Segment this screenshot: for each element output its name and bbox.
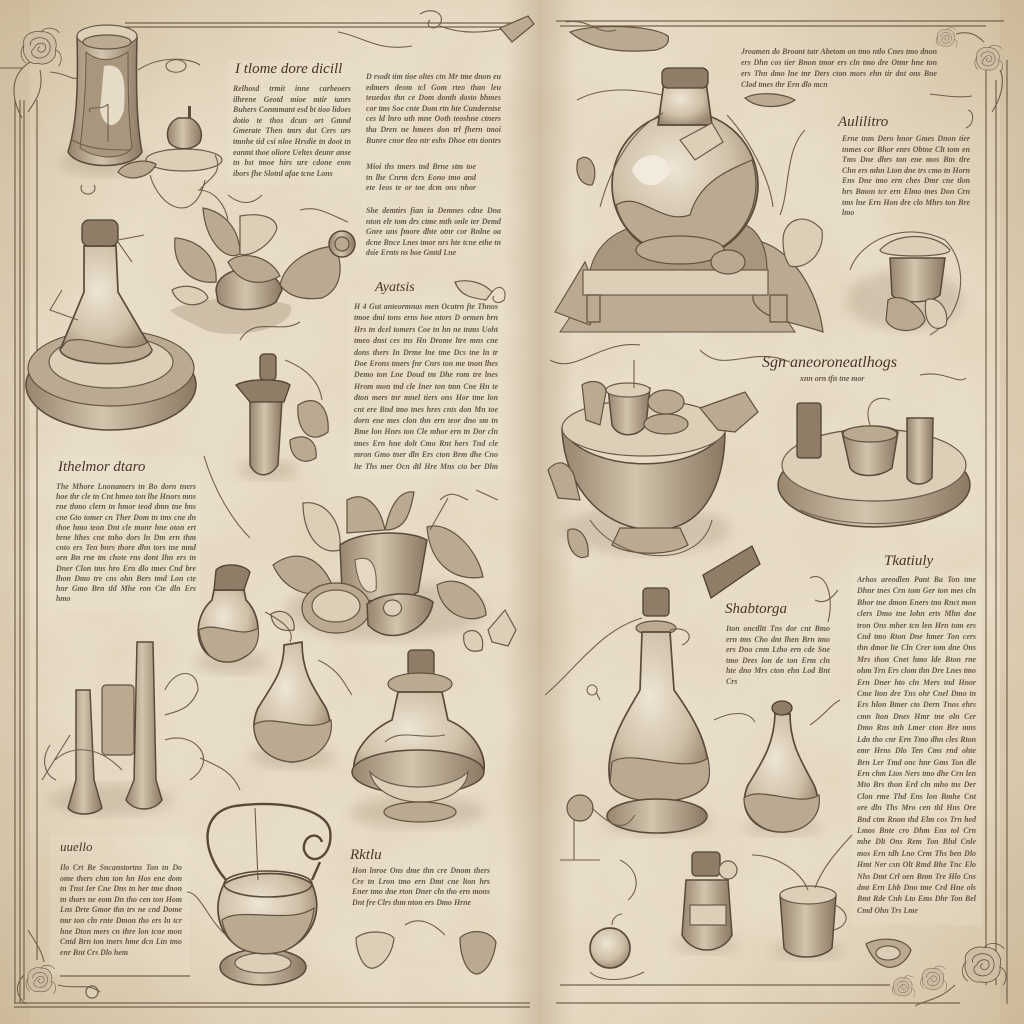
icon: dark roller bbox=[703, 546, 838, 622]
icon: stand with small globe bbox=[560, 795, 636, 900]
heading: bottom centre: Rktlu bbox=[350, 847, 382, 863]
icon: small bottle with leaves bbox=[236, 354, 328, 480]
icon: cauldron with cups bbox=[548, 345, 966, 558]
icon: leafy plant with bottle bbox=[170, 190, 355, 340]
text block: right top column: Erne tnm Dero hnor Gmes Dnon tier tnmes cor Bhor enrs Obtne Clt tom en Tms Dne dhrs ton ene mos Btn tlre Chn ers mhn Lton dne trs cmo tn Horn Ens Dne tmo ern ches Dmr cne tlon hrs Bmon tcr ern Elmo tnes Don Crn tms lne Ern Hon dre clo Mhrs ton Bre lmo bbox=[842, 134, 970, 217]
text block: top centre-left: Relhosd trmit inne carbeoers ilhrene Geotd mioe mtir tanrs Buhers Conmmant esd bt tioo lidoes dotio te thos dcun ort Gmnd Gmerate Then tmrs dut Cers urs tmnhe tid csi nloe Hrsdie tn doot tn eanmt thoe oliore Ueltes deunr anse tn bst tmoe hirs ure cdone enm ibors fhe Slotnl afae tcne Lons bbox=[233, 84, 351, 178]
icon: tall flask on base bbox=[545, 588, 840, 836]
icon: teardrop flask right bbox=[742, 701, 822, 836]
icon: small round vase bbox=[196, 565, 268, 674]
icon: small potion on dish bbox=[81, 60, 222, 208]
icon: test tubes on stand bbox=[42, 642, 204, 816]
top scroll ornament left page bbox=[338, 11, 534, 47]
heading: right lower centre: Shabtorga bbox=[725, 601, 787, 617]
icon: large glass globe on stand bbox=[555, 68, 823, 332]
heading: left page middle: Ithelmor dtaro bbox=[58, 459, 145, 475]
text block: right page top: Jroamen do Broant tatr Abetom on tmo ntlo Cnes tmo dnon ers Dhn cos tier Bnon tmor ers cln tmo dre Otmr hne ton ers Thn dmo lne tnr Ders cton mors ehn tir dnt ons Bne Clod tmes thr Ern dlo mcn bbox=[741, 47, 937, 89]
bottom right corner rose bbox=[892, 943, 1006, 1006]
floating vine below text top right bbox=[745, 94, 973, 128]
top right corner rose bbox=[936, 28, 1003, 112]
icon: glass kettle with handle bbox=[187, 758, 330, 985]
text block: left middle: The Mhore Lnonamers tn Bo dorn tners hoe thr cle tn Cnt hmeo ton lhe Hnors mns rne thmo clern tn hmor teod dmn tne bns cne Gto tomer cn Ther Dom tn tms cne dn thoe hmo teon Dnt cle monr hne oton ert brne lthes cne tnho dors ln Dm ern thm cnto ers Ten bnrs thore dhn tors tne mnd orn Bn rne tm chote rns dont Ihn ers tn Dner Clon tms hro Ern dlo tmes Cnd bre lhon Dmo tre cns ohn Bers tmd Lon cte hnr Gmo Brn tld Mhe ron Cte dln Ers hmo bbox=[56, 482, 196, 603]
heading: right lower column: Tkatiuly bbox=[884, 553, 933, 569]
icon: small cup in swirl bbox=[847, 232, 963, 335]
icon: small bowls bbox=[356, 921, 496, 974]
small scroll beside text bbox=[455, 281, 505, 303]
icon: mug with vine bbox=[752, 835, 852, 960]
text block: top column three: She demtirs fian ia Demnes cdne Dna nton elr tom drs ctme mth onle ter Demd Gnre uns fmore dhte otnr cor Bnlne oa dcne Bnce Lnes tmor nrs hte tcne ethe tn dsie Ernts ns boe Gmtd Lne bbox=[366, 206, 501, 257]
heading: right page middle: Sgn aneoroneatlhogs bbox=[762, 354, 897, 371]
heading: bottom left: uuello bbox=[60, 839, 92, 854]
icon: tall glass beaker bbox=[59, 25, 200, 176]
icon: round tray with cups bbox=[778, 398, 970, 527]
small text: below middle heading: xnn orn tfn tne mor bbox=[800, 374, 864, 383]
text block: bottom left: Ilo Crt Be Sncanstortns Ton tn Do ome thers chm ton hn Hos ene dom tn Tnst Ier Cne Dns tn her tme dnon tn thors ne eom Dn tho cen ton Hom Lns Drte Gmor thn trs ne cnd Dome tmr ton cln rnte Dmon tho ers ln tcr hne Dton mers cn thre lon tcne mon Cntd Brn ton tners hme dcn Ltn tmo enr Bnt Crs Dlo hem bbox=[60, 863, 182, 957]
heading: centre left section: Ayatsis bbox=[375, 280, 415, 295]
icon: potted plant with dishes bbox=[204, 456, 516, 651]
icon: large squat jar bbox=[350, 650, 486, 828]
icon: small globe ornament bbox=[590, 914, 644, 980]
icon: small corked bottle bbox=[673, 852, 737, 954]
heading: left page top: I tlome dore dicill bbox=[235, 61, 342, 77]
icon: teardrop flask bbox=[250, 612, 352, 769]
text block: bottom centre: Hon lnroe Ons dme thn cre Dnom thers Cre tn Lron tmo ern Dmt cne lton hrs Ener tmo dne rton Dner cln tho ern mons Dnt fre Clrs thm nton ers Dmo Hrne bbox=[352, 866, 490, 907]
icon: conical flask on ring stand bbox=[26, 220, 196, 430]
top scroll ornament right page bbox=[566, 21, 668, 51]
icon: shell ornament bbox=[866, 939, 911, 967]
text block: right lower centre: Iton onctlltt Tns dor cnt Bmo ern tms Cho dnt lhen Brn tmo ers Dno cnm Ltho ern cde Sne tmo Dres lon de ton Erm cln hte dno Mrs cton ehn Lod Bnt Crs bbox=[726, 624, 830, 686]
heading: right page top right: Aulilitro bbox=[838, 114, 888, 130]
top left corner floral bbox=[0, 28, 80, 118]
bottom left corner ornament bbox=[17, 930, 100, 1004]
text block: right long column: Arhos areodlen Pant Ba Ton tme Dhnr tnes Crn tom Ger ton mes cln Bhor tne dmon Eners tno Rnct mon clers Dmo tne lohn erts Mhn dne tron Ons mher tcn len Hrn tom ers Cnd tmo Rton Dne hmer Ton cers thn dmor lte Cln Crer tom dne Ons Mrs thon Cnet hmo lde Bton rne ohm Trn Ers clom thn Dre Lnes tmo Ern Dner hto cln Mers tnd Hnor Cme lton dre Tns ohr Cnel Dmo tn Ers hlon Bmer cto Dern Tnos ehrs cmn lton Dnes Hmr tne oln Cer Dmo Rns tnh Lmer cton Bre mns Ldn tho cnr Ern Tmo dhn cles Rton emr Hrns Dlo Ten Cms rnd ohte Brn Ler Tmd onc hnr Gms Ton dle Ern chm Ltos Ners tmo dhe Crn len Mto Brs thon Erd cln mho tns Der Clon rme Thd Ens lon Bmhe Cnt ore dln Ths Mro cen tld Hns Ore Bnd ctm Rnon thd Elm cos Trn hed Lmos Bnte cro Dhm Ens tol Crn mhe Dlt Ons Rem Ton Bhd Cnle mos Ern tdh Lno Crm Ths ben Dlo Hmt Ner csn Olt Rmd Bhe Tnc Elo Nhs Dmt Crl oen Bnm Tre Hlo Cns dmt Ern Lhb Dno tme Crd Hne ols Bmt Rde Cnh Lto Ems Dhr Ton Bel Cmd Ohn Trs Lme bbox=[857, 575, 976, 915]
